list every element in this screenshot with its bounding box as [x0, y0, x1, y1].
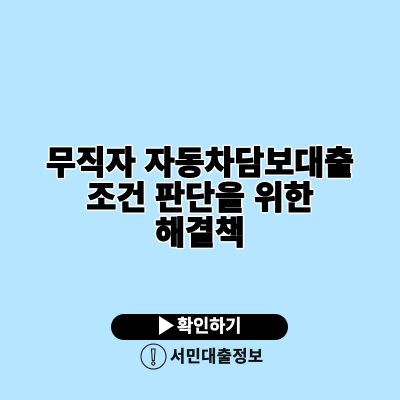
title: [45, 144, 355, 251]
title: 해결책: [155, 215, 245, 251]
icon: play triangle: [159, 316, 174, 335]
title: 무직자 자동차담보대출: [46, 145, 354, 181]
icon: exclamation circle: [140, 344, 166, 370]
button label: 확인하기: [177, 316, 241, 336]
brand label: 서민대출정보: [170, 348, 263, 366]
title: 조건 판단을 위한: [86, 180, 314, 216]
button: confirm: [111, 314, 288, 340]
